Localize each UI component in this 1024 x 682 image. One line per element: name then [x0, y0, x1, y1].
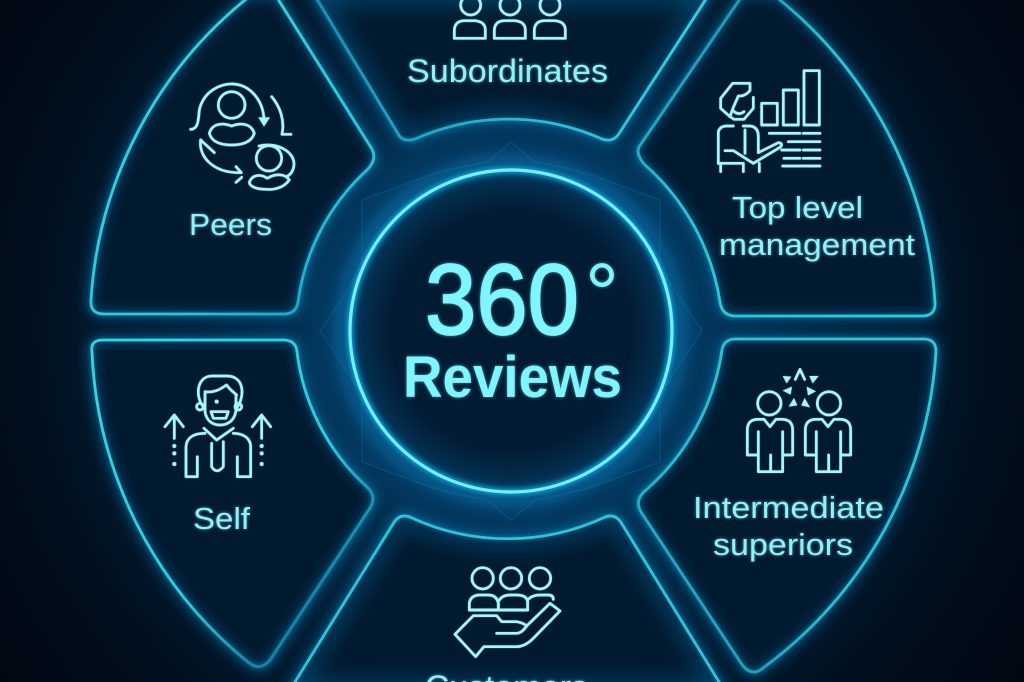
- panel: peers: [91, 0, 374, 314]
- panel: subordinates: [315, 0, 708, 140]
- label: intermediate superiors: [693, 490, 884, 562]
- label: intermediate superiors: Intermediate: [693, 490, 884, 525]
- icon: three subordinates: [454, 0, 565, 38]
- icon: presenter with bar chart: [718, 71, 820, 172]
- icon: peers exchange: [191, 84, 294, 189]
- icon: two superiors with star: [747, 369, 851, 472]
- label: top level management: [719, 190, 915, 262]
- label: intermediate superiors: superiors: [713, 527, 853, 562]
- panel: self: [92, 340, 373, 667]
- icon: person with up arrows: [165, 376, 271, 477]
- title word: Reviews: [403, 345, 622, 410]
- center hub: 360 reviews: [320, 142, 702, 520]
- icon: hand holding customers: [455, 568, 560, 657]
- label: peers: Peers: [189, 207, 272, 242]
- title number: 360: [425, 244, 579, 356]
- label: top level management: Top level: [732, 190, 863, 225]
- label: self: Self: [193, 501, 250, 536]
- panel: customers: [290, 516, 724, 682]
- label: subordinates: Subordinates: [407, 53, 608, 89]
- label: top level management: management: [719, 227, 915, 262]
- title number: °: [585, 247, 619, 342]
- panel: intermediate superiors: [638, 339, 936, 672]
- panel: top level management: [638, 0, 935, 316]
